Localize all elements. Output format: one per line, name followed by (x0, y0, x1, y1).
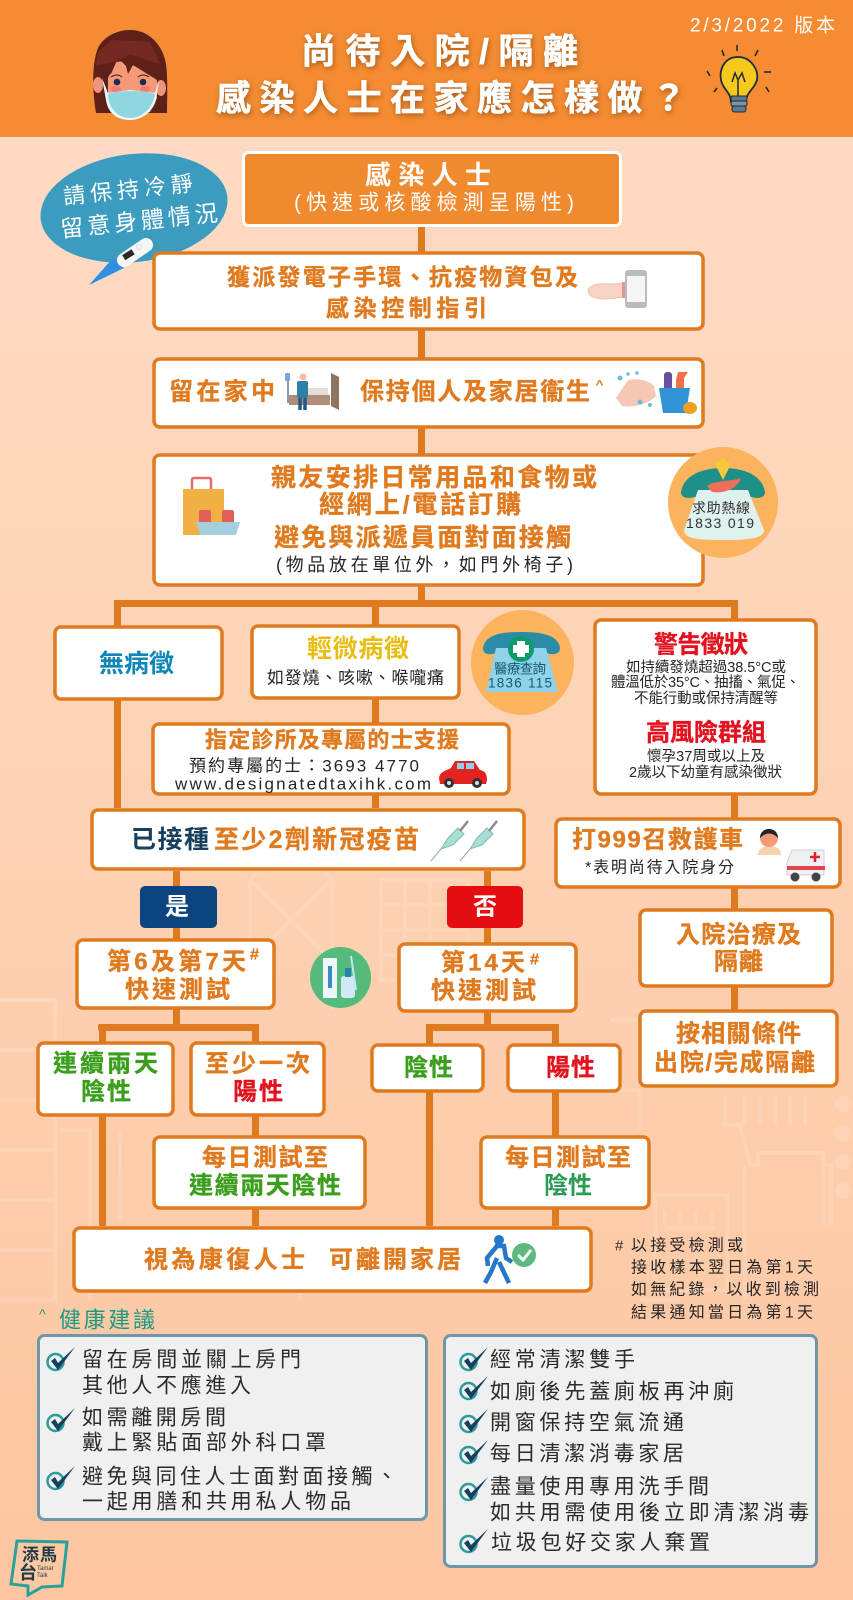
icon: thermometer (89, 244, 146, 285)
box: two consecutive negative (38, 1043, 173, 1115)
item: stay in room: 其他人不應進入 (82, 1374, 251, 1398)
logo: Tamar Talk (11, 1541, 67, 1595)
item: close toilet lid: 如廁後先蓋廁板再沖廁 (490, 1380, 734, 1404)
box: vaccinated at least 2 doses: 已接種 (131, 826, 209, 854)
item: disinfect home: 每日清潔消毒家居 (490, 1442, 684, 1466)
label: no: 否 (473, 894, 497, 920)
box: warning symptoms and high risk group: 如持續發燒超過38.5°C或 (626, 659, 786, 676)
box: day 14 rapid test (399, 944, 576, 1011)
panel: hygiene advice (444, 1336, 816, 1566)
logo: Tamar Talk: 添馬 (22, 1546, 57, 1564)
box: day 6 and 7 rapid test: 第6及第7天 (107, 948, 246, 976)
note: day counting: # (615, 1238, 624, 1254)
logo: Tamar Talk: Talk (37, 1573, 49, 1579)
heading: health advice: ^ (39, 1306, 46, 1324)
box: electronic wristband and kit: 感染控制指引 (326, 295, 487, 321)
heading: health advice: 健康建議 (59, 1308, 155, 1332)
header title: 感染人士在家應怎樣做？ (216, 80, 686, 118)
header title: 尚待入院/隔離 (301, 32, 578, 72)
box: mild symptoms: 如發燒、咳嗽、喉嚨痛 (267, 668, 444, 688)
box: day 6 and 7 rapid test: # (250, 946, 259, 964)
label: yes (140, 886, 217, 928)
note: day counting: 接收樣本翌日為第1天 (631, 1258, 813, 1276)
badge: help hotline: 求助熱線 (692, 500, 750, 516)
box: positive: 陽性 (546, 1054, 595, 1082)
icon: hand washing (616, 371, 656, 407)
box: infected person: (快速或核酸檢測呈陽性) (294, 192, 574, 214)
header title (216, 32, 686, 118)
box: no symptoms: 無病徵 (99, 649, 174, 678)
icon: rapid test kit (310, 947, 371, 1008)
box: daily test until negative: 每日測試至 (505, 1144, 631, 1172)
box: stay home and keep hygiene: 留在家中 (169, 378, 275, 406)
box: day 6 and 7 rapid test (77, 940, 274, 1008)
box: designated clinic and taxi: 預約專屬的士：3693 4770 (189, 756, 419, 776)
icon: cleaning products (659, 372, 697, 414)
skyline background pattern (0, 830, 851, 1300)
label: no (447, 886, 523, 928)
box: warning symptoms and high risk group (595, 620, 816, 794)
logo: Tamar Talk: 台 (19, 1562, 37, 1583)
item: waste disposal: 垃圾包好交家人棄置 (491, 1532, 710, 1554)
icon: light bulb (707, 45, 771, 112)
box: two consecutive negative: 陰性 (81, 1078, 131, 1106)
icon: walking person with check (485, 1235, 536, 1283)
icon: wristband and phone (588, 270, 647, 308)
item: stay in room (48, 1347, 301, 1398)
item: ventilate: 開窗保持空氣流通 (490, 1412, 684, 1434)
box: warning symptoms and high risk group: 2歲以下幼童有感染徵狀 (629, 763, 782, 781)
item: wear surgical mask (48, 1406, 326, 1454)
item: wear surgical mask: 戴上緊貼面部外科口罩 (82, 1432, 326, 1454)
box: discharge (640, 1011, 837, 1086)
item: wash hands: 經常清潔雙手 (490, 1348, 635, 1372)
box: hospital treatment: 入院治療及 (676, 920, 801, 948)
icon: person at home (285, 373, 339, 410)
box: call 999: *表明尚待入院身分 (585, 858, 734, 876)
note: day counting: 以接受檢測或 (631, 1236, 743, 1254)
box: infected person: 感染人士 (365, 160, 491, 190)
box: electronic wristband and kit: 獲派發電子手環、抗疫物資包及 (227, 264, 578, 290)
note: day counting (615, 1236, 819, 1322)
version date: 2/3/2022 版本 (690, 14, 835, 36)
box: mild symptoms (252, 626, 459, 698)
badge: medical enquiry: 1836 115 (488, 676, 552, 690)
badge: help hotline (668, 447, 778, 558)
box: designated clinic and taxi: 指定診所及專屬的士支援 (205, 728, 459, 752)
badge: medical enquiry (471, 610, 574, 715)
box: day 6 and 7 rapid test: 快速測試 (125, 976, 230, 1004)
box: warning symptoms and high risk group: 體溫低於35°C、抽搐、氣促、 (611, 674, 800, 691)
box: warning symptoms and high risk group: 警告徵狀 (654, 632, 748, 658)
logo: Tamar Talk: Tamar (37, 1566, 54, 1572)
note: day counting: 如無紀錄，以收到檢測 (631, 1280, 819, 1298)
box: hospital treatment: 隔離 (714, 948, 763, 976)
box: designated clinic and taxi: www.designatedtaxihk.com (174, 774, 431, 794)
box: daily test until negative: 陰性 (544, 1172, 592, 1200)
box: arrange daily goods: 避免與派遞員面對面接觸 (274, 524, 571, 552)
box: vaccinated at least 2 doses (92, 810, 524, 869)
box: arrange daily goods: 親友安排日常用品和食物或 (271, 463, 597, 492)
box: warning symptoms and high risk group: 不能行動或保持清醒等 (634, 689, 778, 707)
speech bubble: stay calm (34, 143, 234, 273)
box: hospital treatment (640, 910, 832, 986)
item: dedicated bathroom: 如共用需使用後立即清潔消毒 (490, 1502, 809, 1524)
box: two consecutive negative: 連續兩天 (53, 1050, 158, 1078)
box: negative (372, 1045, 483, 1091)
icon: person on the phone (758, 829, 781, 855)
item: wear surgical mask: 如需離開房間 (82, 1406, 226, 1430)
box: infected person (244, 152, 620, 226)
box: discharge: 按相關條件 (676, 1020, 801, 1048)
flow connectors (98, 227, 738, 1226)
box: arrange daily goods (154, 455, 703, 585)
speech bubble: stay calm: 留意身體情況 (59, 200, 219, 242)
badge: help hotline: 1833 019 (686, 515, 754, 531)
box: daily test until two negatives (154, 1137, 365, 1208)
box: no symptoms (55, 627, 222, 699)
box: day 14 rapid test: 快速測試 (431, 978, 536, 1004)
box: stay home and keep hygiene: 保持個人及家居衞生 (360, 378, 590, 406)
box: regarded as recovered: 視為康復人士 (144, 1246, 305, 1274)
box: arrange daily goods: (物品放在單位外，如門外椅子) (276, 555, 573, 575)
box: at least one positive: 至少一次 (205, 1050, 310, 1078)
box: daily test until negative (481, 1137, 649, 1208)
item: avoid contact: 避免與同住人士面對面接觸、 (82, 1466, 397, 1488)
box: vaccinated at least 2 doses: 至少2劑新冠疫苗 (214, 826, 419, 854)
box: stay home and keep hygiene: ^ (596, 378, 603, 394)
box: warning symptoms and high risk group: 懷孕37周或以上及 (647, 748, 765, 765)
icon: shopping bag and drinks (183, 478, 240, 535)
box: electronic wristband and kit (154, 253, 703, 329)
box: discharge: 出院/完成隔離 (654, 1048, 815, 1076)
box: mild symptoms: 輕微病徵 (307, 635, 409, 663)
header banner (0, 0, 853, 137)
box: regarded as recovered: 可離開家居 (329, 1246, 461, 1274)
panel: isolation advice (38, 1336, 426, 1520)
box: arrange daily goods: 經網上/電話訂購 (319, 491, 521, 519)
icon: syringes (431, 821, 497, 861)
item: dedicated bathroom (460, 1476, 809, 1524)
box: at least one positive: 陽性 (233, 1078, 283, 1106)
item: avoid contact: 一起用膳和共用私人物品 (82, 1490, 351, 1514)
box: positive (508, 1045, 620, 1091)
note: day counting: 結果通知當日為第1天 (631, 1302, 813, 1322)
item: stay in room: 留在房間並關上房門 (82, 1348, 301, 1372)
box: day 14 rapid test: # (530, 952, 539, 968)
item: avoid contact (48, 1466, 397, 1514)
box: daily test until two negatives: 每日測試至 (202, 1144, 328, 1172)
box: call 999 (556, 819, 840, 887)
label: yes: 是 (165, 894, 189, 920)
badge: medical enquiry: 醫療查詢 (494, 660, 546, 676)
icon: woman wearing mask (93, 30, 167, 120)
box: warning symptoms and high risk group: 高風險群組 (646, 718, 766, 746)
icon: red taxi (439, 761, 487, 788)
box: at least one positive (191, 1043, 324, 1115)
box: daily test until two negatives: 連續兩天陰性 (189, 1172, 341, 1200)
icon: ambulance (787, 850, 825, 882)
box: negative: 陰性 (404, 1054, 453, 1082)
speech bubble: stay calm: 請保持冷靜 (62, 171, 194, 209)
box: call 999: 打999召救護車 (572, 826, 743, 854)
item: dedicated bathroom: 盡量使用專用洗手間 (490, 1476, 709, 1498)
box: day 14 rapid test: 第14天 (441, 950, 525, 976)
box: regarded as recovered (74, 1228, 591, 1291)
box: stay home and keep hygiene (154, 359, 703, 427)
box: designated clinic and taxi (153, 724, 509, 794)
